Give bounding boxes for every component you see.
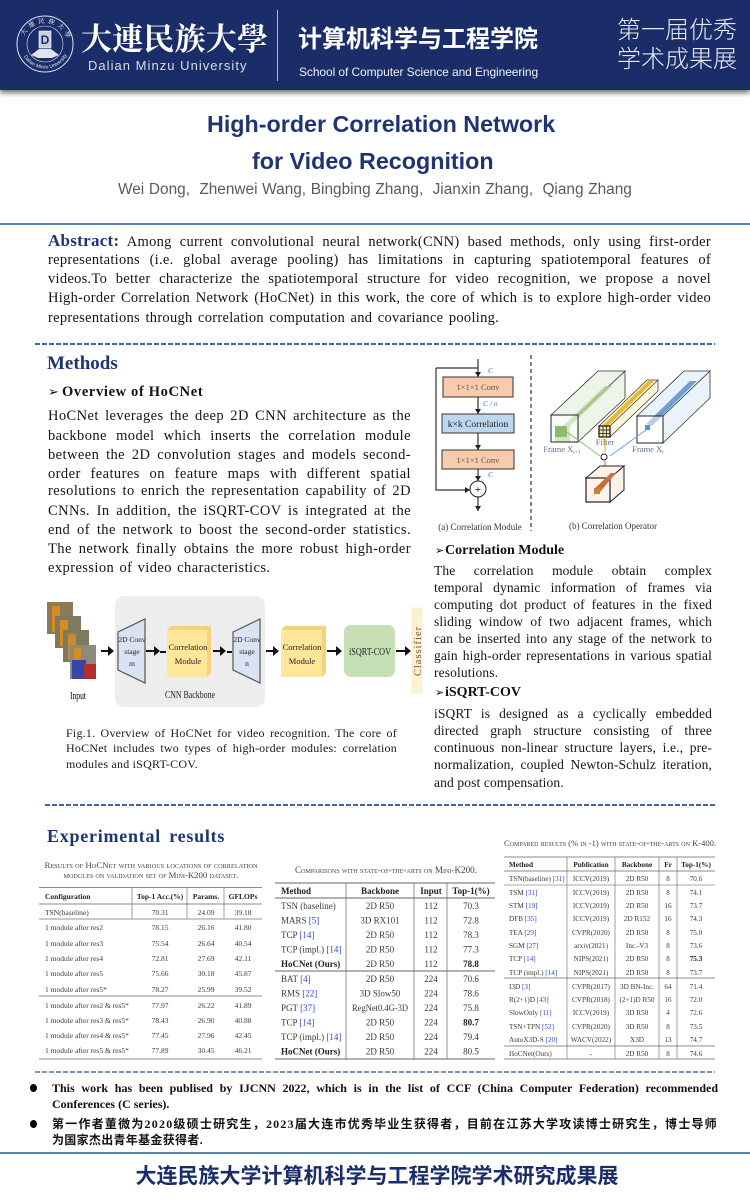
table: comparisons on K-400: 2D R50 (626, 929, 649, 937)
table: comparisons on Mini-K200: Input (420, 886, 442, 896)
table: comparisons on Mini-K200: 70.6 (463, 974, 479, 984)
table: comparisons on K-400: 16 (664, 996, 672, 1004)
table: comparisons on K-400: 73.5 (690, 1023, 703, 1031)
table: comparisons on K-400: Fr (664, 861, 673, 869)
table: comparisons on Mini-K200: 80.7 (463, 1018, 479, 1028)
text: overview paragraph: CNNs. In addition, the iSQRT-COV is integrated at the (48, 503, 411, 519)
table: comparisons on Mini-K200: TCP (impl.) [14] (281, 1032, 341, 1042)
table: comparisons on K-400: 16 (664, 915, 672, 923)
text: overview paragraph: end of the network to boost the second-order statistics. (48, 522, 411, 538)
table: comparisons on Mini-K200: Comparisons with state-of-the-arts on Mini-K200. (295, 865, 477, 875)
text: overview paragraph: The network finally obtains the more robust high-order (48, 541, 411, 557)
table: comparisons on K-400: 74.1 (690, 889, 703, 897)
table: comparisons on K-400: I3D [3] (509, 983, 530, 991)
block: correlation module 1 (167, 626, 211, 677)
subheading: Correlation Module: Correlation Module (445, 543, 564, 558)
diagram: correlation module: C (488, 366, 494, 375)
arrow (327, 650, 337, 652)
table: comparisons on K-400: NIPS(2021) (574, 955, 609, 963)
table: comparisons on Mini-K200 (275, 865, 495, 1060)
figure caption: Fig.1. Overview of HoCNet for video recognition. The core of (66, 726, 397, 740)
table: comparisons on K-400: 3D R50 (626, 1023, 649, 1031)
table: comparisons on K-400: CVPR(2018) (572, 996, 611, 1004)
figure: correlation module and operator (435, 355, 711, 532)
table: comparisons on Mini-K200: 224 (424, 1003, 438, 1013)
table: comparisons on Mini-K200: Top-1(%) (452, 886, 490, 896)
table: comparisons on K-400: 8 (666, 969, 670, 977)
table: comparisons on Mini-K200: 2D R50 (366, 1046, 395, 1056)
text: iSQRT paragraph: continuous non-linear structure layers, i.e., pre- (434, 740, 712, 755)
table: comparisons on Mini-K200: 79.4 (463, 1032, 479, 1042)
table: comparisons on K-400: 70.6 (690, 875, 703, 883)
table: correlation module locations: 75.54 (152, 939, 169, 948)
table: comparisons on K-400: 74.3 (690, 915, 703, 923)
divider (0, 223, 750, 225)
table: comparisons on K-400: ICCV(2019) (573, 875, 610, 883)
table: comparisons on K-400: - (590, 1050, 593, 1058)
table: comparisons on Mini-K200: HoCNet (Ours) (281, 959, 340, 969)
table: comparisons on K-400: TCP (impl.) [14] (509, 969, 557, 977)
subheading: iSQRT-COV: ➢ (435, 686, 444, 699)
table: correlation module locations: 77.89 (152, 1046, 169, 1055)
diagram: correlation operator: t+1 (573, 450, 581, 456)
table: comparisons on K-400: 8 (666, 875, 670, 883)
table: correlation module locations: 1 module after res3 & res5* (45, 1016, 129, 1025)
table: comparisons on K-400: 16 (664, 902, 672, 910)
table: comparisons on Mini-K200: 2D R50 (366, 974, 395, 984)
table: comparisons on K-400: SlowOnly [11] (509, 1009, 552, 1017)
arrow (213, 651, 232, 652)
table: comparisons on K-400: NIPS(2021) (574, 969, 609, 977)
table: comparisons on K-400: 2D R50 (626, 889, 649, 897)
diagram: correlation operator (543, 371, 710, 531)
table: comparisons on K-400: STM [19] (509, 902, 538, 910)
table: correlation module locations: 39.18 (235, 908, 252, 917)
table: comparisons on K-400: 8 (666, 955, 670, 963)
diagram: correlation operator: t (662, 450, 664, 456)
text: iSQRT paragraph (434, 706, 712, 790)
table: comparisons on K-400: Publication (573, 861, 609, 869)
table: correlation module locations: 27.96 (198, 1031, 215, 1040)
heading: Methods: Methods (47, 353, 118, 374)
table: comparisons on K-400: AutoX3D-S [20] (509, 1036, 558, 1044)
abstract: representations through correlation computation and covariance pooling. (48, 310, 499, 326)
note: publication (30, 1081, 718, 1111)
note: first author (30, 1117, 718, 1147)
panel: CNN backbone: CNN Backbone (165, 689, 215, 701)
table: comparisons on K-400: ICCV(2019) (573, 902, 610, 910)
table: comparisons on K-400: 64 (664, 983, 672, 991)
table: correlation module locations: 26.22 (198, 1001, 215, 1010)
table: comparisons on Mini-K200: 112 (424, 901, 438, 911)
table: comparisons on K-400: ICCV(2019) (573, 1009, 610, 1017)
table: comparisons on Mini-K200: RegNet0.4G-3D (352, 1003, 408, 1013)
table: comparisons on K-400: TSN+TPN [52] (509, 1023, 554, 1031)
title line 1: High-order Correlation Network (207, 111, 555, 137)
text: iSQRT paragraph: iSQRT is designed as a cyclically embedded (434, 706, 712, 721)
table: correlation module locations: 1 module after res5 (45, 969, 103, 978)
table: comparisons on K-400: Compared results (% in -1) with state-of-the-arts on K-400. (504, 838, 716, 848)
table: comparisons on K-400: SGM [27] (509, 942, 538, 950)
diagram: correlation module: k×k Correlation (448, 420, 508, 430)
table: comparisons on Mini-K200: RMS [22] (281, 988, 317, 998)
table: correlation module locations: 1 module after res4 (45, 954, 103, 963)
header divider (277, 10, 278, 81)
table: comparisons on Mini-K200: PGT [37] (281, 1003, 315, 1013)
note: publication: This work has been publised by IJCNN 2022, which is in the list of CCF (China Computer Federation) recommended (52, 1081, 718, 1095)
arrow (266, 650, 274, 652)
block: correlation module 2 (281, 626, 326, 677)
text: correlation module paragraph: temporal dynamic information of frames via (434, 580, 712, 595)
text: iSQRT paragraph: and post compensation. (434, 775, 564, 790)
table: comparisons on Mini-K200: 2D R50 (366, 1018, 395, 1028)
table: comparisons on Mini-K200: 112 (424, 944, 438, 954)
heading: Experimental results: Experimental results (47, 826, 225, 846)
table: comparisons on K-400: HoCNet(Ours) (509, 1050, 552, 1058)
table: correlation module locations: 40.88 (235, 1016, 252, 1025)
text: correlation module paragraph (434, 563, 712, 680)
diagram: correlation operator: (b) Correlation Operator (569, 521, 657, 531)
text: overview paragraph (48, 408, 411, 576)
text: correlation module paragraph: gain high-order representations in various spatial (434, 648, 712, 663)
diagram: correlation module: C (488, 470, 494, 479)
exhibition title: 第一届优秀 (617, 17, 737, 44)
block: iSQRT-COV (344, 625, 395, 677)
table: comparisons on K-400: 2D R50 (626, 969, 649, 977)
table: correlation module locations: 1 module after res4 & res5* (45, 1031, 129, 1040)
table: correlation module locations: GFLOPs (229, 892, 257, 901)
table: correlation module locations: 30.45 (198, 1046, 215, 1055)
table: comparisons on K-400: 75.3 (690, 955, 703, 963)
table: comparisons on K-400: DFB [35] (509, 915, 537, 923)
block: correlation module 1: Module (175, 656, 201, 666)
table: comparisons on K-400: 72.0 (690, 996, 703, 1004)
table: correlation module locations: 39.52 (235, 985, 252, 994)
block: 2D conv stage m: m (129, 659, 135, 668)
table: correlation module locations: 42.45 (235, 1031, 252, 1040)
table: comparisons on K-400: 71.4 (690, 983, 703, 991)
subheading: iSQRT-COV: iSQRT-COV (445, 685, 521, 700)
icon: university logo: Dalian Minzu University (24, 54, 67, 69)
authors: Wei Dong, Zhenwei Wang, Bingbing Zhang, Jianxin Zhang, Qiang Zhang (118, 181, 632, 198)
school name English: School of Computer Science and Engineering (299, 65, 538, 79)
table: comparisons on Mini-K200: 80.5 (463, 1046, 479, 1056)
table: comparisons on Mini-K200: 78.3 (463, 930, 479, 940)
table: comparisons on Mini-K200: 224 (424, 1032, 438, 1042)
table: correlation module locations: Params. (193, 892, 219, 901)
school name Chinese: 计算机科学与工程学院 (298, 26, 538, 53)
diagram: correlation module: 1×1×1 Conv (457, 455, 500, 465)
table: comparisons on Mini-K200: 78.6 (463, 988, 479, 998)
table: correlation module locations: 70.31 (152, 908, 169, 917)
figure: HoCNet overview diagram (47, 596, 424, 707)
table: comparisons on K-400: R(2+1)D [43] (509, 996, 549, 1004)
bullet (30, 1084, 37, 1092)
title line 2: for Video Recognition (252, 148, 494, 174)
university name English: Dalian Minzu University (88, 58, 248, 73)
table: comparisons on K-400: 8 (666, 1023, 670, 1031)
block: 2D conv stage m: stage (124, 647, 140, 656)
table: comparisons on K-400: 74.7 (690, 1036, 703, 1044)
table: comparisons on K-400: 4 (666, 1009, 670, 1017)
abstract: High-order Correlation Network (HoCNet) in this work, the core of which is to explore high-order video (48, 290, 711, 306)
table: correlation module locations: 75.66 (152, 969, 169, 978)
table: comparisons on Mini-K200: TSN (baseline) (281, 901, 336, 911)
table: comparisons on K-400: 73.6 (690, 942, 703, 950)
table: correlation module locations: 77.45 (152, 1031, 169, 1040)
table: correlation module locations: 72.81 (152, 954, 169, 963)
table: correlation module locations: Top-1 Acc.(%) (137, 892, 184, 901)
block: 2D conv stage m (118, 619, 146, 683)
block: 2D conv stage n (233, 619, 261, 683)
table: comparisons on Mini-K200: 112 (424, 930, 438, 940)
input video frames (47, 602, 96, 702)
table: correlation module locations: 1 module after res5* (45, 985, 107, 994)
table: correlation module locations: 26.90 (198, 1016, 215, 1025)
text: overview paragraph: expression of video characteristics. (48, 560, 270, 576)
table: correlation module locations: 30.18 (198, 969, 215, 978)
table: comparisons on K-400: ICCV(2019) (573, 889, 610, 897)
table: correlation module locations: 26.64 (198, 939, 215, 948)
table: correlation module locations: modules on validation set of Mini-K200 dataset. (64, 870, 238, 880)
table: correlation module locations: 1 module after res3 (45, 939, 103, 948)
table: comparisons on K-400: 8 (666, 929, 670, 937)
table: comparisons on Mini-K200: BAT [4] (281, 974, 311, 984)
table: correlation module locations: 40.54 (235, 939, 252, 948)
diagram: correlation module: 1×1×1 Conv (457, 382, 500, 392)
table: comparisons on Mini-K200: 2D R50 (366, 959, 395, 969)
divider (0, 1152, 750, 1154)
table: correlation module locations: 45.87 (235, 969, 252, 978)
table: comparisons on K-400: 2D R50 (626, 902, 649, 910)
block: 2D conv stage n: 2D Conv (233, 635, 261, 644)
diagram: correlation module (436, 359, 522, 532)
table: comparisons on K-400: TEA [29] (509, 929, 536, 937)
table: correlation module locations: TSN(baseline) (45, 908, 89, 917)
table: comparisons on K-400: 13 (664, 1036, 672, 1044)
table: comparisons on K-400: Inc.-V3 (626, 942, 648, 950)
table: correlation module locations: 26.16 (198, 923, 215, 932)
dashed divider (45, 804, 716, 806)
table: comparisons on K-400: (2+1)D R50 (620, 996, 655, 1004)
table: correlation module locations: 1 module after res2 (45, 923, 103, 932)
table: comparisons on K-400: 3D R50 (626, 1009, 649, 1017)
block: correlation module 1: Correlation (169, 642, 208, 652)
diagram: correlation operator: Frame X (632, 444, 664, 456)
table: comparisons on Mini-K200: TCP [14] (281, 1018, 314, 1028)
table: correlation module locations: Configuration (45, 892, 91, 901)
table: correlation module locations: 78.43 (152, 1016, 169, 1025)
table: comparisons on K-400: Method (509, 861, 533, 869)
table: comparisons on K-400: CVPR(2017) (572, 983, 611, 991)
text: overview paragraph: between the 2D convolution stages and models second- (48, 447, 411, 463)
block: 2D conv stage n: stage (239, 647, 255, 656)
text: correlation module paragraph: computing dot product of features in the fixed (434, 597, 712, 612)
table: comparisons on K-400: arxiv(2021) (574, 942, 609, 950)
icon: university logo: D (41, 33, 50, 47)
table: correlation module locations: 25.99 (198, 985, 215, 994)
table: comparisons on K-400: 2D R50 (626, 955, 649, 963)
block: classifier: Classifier (413, 626, 424, 676)
separator (530, 355, 532, 531)
diagram: correlation operator: Filter (596, 437, 614, 447)
table: comparisons on K-400: 73.7 (690, 969, 703, 977)
diagram: correlation operator: Frame X (543, 444, 581, 456)
table: comparisons on K-400: 3D BN-Inc. (620, 983, 654, 991)
block: correlation module 2: Module (289, 656, 315, 666)
text: overview paragraph: backbone model which inserts the correlation module (48, 428, 411, 444)
diagram: correlation module: (a) Correlation Module (438, 522, 522, 532)
table: comparisons on K-400: 8 (666, 942, 670, 950)
footer title: 大连民族大学计算机科学与工程学院学术研究成果展 (136, 1165, 618, 1188)
table: comparisons on Mini-K200: 3D Slow50 (360, 988, 401, 998)
diagram: correlation module: + (475, 484, 481, 496)
table: comparisons on Mini-K200: 2D R50 (366, 944, 395, 954)
text: correlation module paragraph: The correlation module obtain complex (434, 563, 712, 578)
block: correlation module 2: Correlation (283, 642, 322, 652)
text: iSQRT paragraph: normalization, coupled Newton-Schulz iteration, (434, 757, 712, 772)
block: 2D conv stage n: n (245, 659, 249, 668)
table: comparisons on K-400: Top-1(%) (681, 861, 711, 869)
abstract: representations (i.e. global average pooling) has limitations in capturing spatiotemporal features of (48, 252, 711, 268)
table: comparisons on Mini-K200: 224 (424, 974, 438, 984)
table: comparisons on K-400: 72.6 (690, 1009, 703, 1017)
exhibition title: 学术成果展 (617, 46, 737, 73)
table: comparisons on K-400: TSM [31] (509, 889, 538, 897)
table: correlation module locations: 77.97 (152, 1001, 169, 1010)
table: comparisons on Mini-K200: 224 (424, 988, 438, 998)
subheading: Correlation Module: ➢ (435, 544, 444, 557)
table: comparisons on Mini-K200: TCP [14] (281, 930, 314, 940)
table: comparisons on K-400 (504, 838, 716, 1060)
table: comparisons on K-400: 2D R50 (626, 1050, 649, 1058)
note: first author: 为国家杰出青年基金获得者. (52, 1133, 203, 1147)
text: correlation module paragraph: sliding window of two adjacent frames, which (434, 614, 712, 629)
table: comparisons on K-400: 8 (666, 889, 670, 897)
table: correlation module locations: 46.21 (235, 1046, 252, 1055)
dashed divider (35, 343, 715, 345)
note: publication: Conferences (C series). (52, 1097, 169, 1111)
icon: university logo (16, 16, 74, 72)
table: comparisons on Mini-K200: 3D RX101 (360, 916, 400, 926)
text: iSQRT paragraph: directed graph structure consisting of three (434, 723, 712, 738)
table: correlation module locations: 41.80 (235, 923, 252, 932)
table: comparisons on Mini-K200: HoCNet (Ours) (281, 1046, 340, 1056)
table: comparisons on Mini-K200: TCP (impl.) [14] (281, 944, 341, 954)
table: comparisons on K-400: TCP [14] (509, 955, 536, 963)
table: comparisons on Mini-K200: 2D R50 (366, 930, 395, 940)
text: overview paragraph: order features on feature maps with different spatial (48, 466, 411, 482)
table: comparisons on Mini-K200: 224 (424, 1046, 438, 1056)
subheading: Overview of HoCNet: ➢ (48, 385, 60, 400)
table: correlation module locations: 41.89 (235, 1001, 252, 1010)
table: comparisons on K-400: TSN(baseline) [31] (509, 875, 565, 883)
table: comparisons on Mini-K200: Method (281, 886, 311, 896)
table: correlation module locations (39, 860, 262, 1060)
text: correlation module paragraph: resolutions. (434, 665, 498, 680)
table: comparisons on Mini-K200: 112 (424, 916, 438, 926)
university name Chinese: 大連民族大學 (81, 14, 268, 59)
abstract: videos.To better characterize the spatiotemporal structure for video recognition, we propose a novel (48, 271, 711, 287)
block: 2D conv stage m: 2D Conv (118, 635, 146, 644)
table: comparisons on K-400: WACV(2022) (571, 1036, 612, 1044)
subheading: Overview of HoCNet: Overview of HoCNet (62, 384, 203, 400)
table: comparisons on K-400: 74.6 (690, 1050, 703, 1058)
table: comparisons on Mini-K200: 77.3 (463, 944, 479, 954)
table: correlation module locations: 78.27 (152, 985, 169, 994)
table: correlation module locations: 24.09 (198, 908, 215, 917)
table: correlation module locations: 1 module after res5 & res5* (45, 1046, 129, 1055)
bullet (30, 1120, 37, 1128)
header banner (0, 0, 750, 90)
arrow (101, 650, 109, 652)
table: comparisons on Mini-K200: 2D R50 (366, 901, 395, 911)
diagram: correlation module: C / n (483, 399, 498, 408)
table: correlation module locations: 78.15 (152, 923, 169, 932)
table: comparisons on K-400: X3D (630, 1036, 644, 1044)
table: comparisons on Mini-K200: 72.8 (463, 916, 479, 926)
table: comparisons on Mini-K200: Backbone (361, 886, 399, 896)
table: comparisons on Mini-K200: 78.8 (463, 959, 479, 969)
table: comparisons on K-400: 8 (666, 1050, 670, 1058)
figure caption: HoCNet includes two types of high-order modules: correlation (66, 741, 397, 755)
table: comparisons on Mini-K200: 112 (424, 959, 438, 969)
figure caption (66, 726, 397, 771)
table: comparisons on K-400: 75.0 (690, 929, 703, 937)
icon: university logo: 大連民族大學 (21, 18, 71, 38)
table: comparisons on Mini-K200: 75.8 (463, 1003, 479, 1013)
table: correlation module locations: 27.69 (198, 954, 215, 963)
table: comparisons on Mini-K200: 224 (424, 1018, 438, 1028)
figure caption: modules and iSQRT-COV. (66, 757, 198, 771)
arrow (396, 650, 406, 652)
exhibition title (617, 17, 737, 73)
table: comparisons on K-400: CVPR(2020) (572, 929, 611, 937)
table: correlation module locations: Results of HoCNet with various locations of correlation (44, 860, 258, 870)
block: classifier (412, 608, 424, 693)
panel: CNN backbone (115, 596, 265, 707)
table: comparisons on K-400: 73.7 (690, 902, 703, 910)
text: overview paragraph: resolutions to enrich the representation capability of 2D (48, 483, 411, 499)
arrow (146, 651, 166, 652)
note: first author: 第一作者董微为2020级硕士研究生，2023届大连市优秀毕业生获得者，目前在江苏大学攻读博士研究生，博士导师 (52, 1117, 718, 1131)
table: correlation module locations: 42.11 (235, 954, 252, 963)
table: comparisons on K-400: 2D R152 (624, 915, 650, 923)
text: overview paragraph: HoCNet leverages the deep 2D CNN architecture as the (48, 408, 411, 424)
block: iSQRT-COV: iSQRT-COV (349, 647, 392, 658)
table: comparisons on Mini-K200: MARS [5] (281, 916, 319, 926)
table: comparisons on K-400: ICCV(2019) (573, 915, 610, 923)
text: correlation module paragraph: can be inserted into any stage of the network to (434, 631, 712, 646)
table: comparisons on Mini-K200: 70.3 (463, 901, 479, 911)
dashed divider (35, 1071, 715, 1073)
table: comparisons on K-400: Backbone (622, 861, 652, 869)
table: correlation module locations: 1 module after res2 & res5* (45, 1001, 129, 1010)
table: comparisons on K-400: CVPR(2020) (572, 1023, 611, 1031)
table: comparisons on K-400: 2D R50 (626, 875, 649, 883)
abstract (48, 232, 711, 326)
table: comparisons on Mini-K200: 2D R50 (366, 1032, 395, 1042)
input video frames: Input (70, 690, 86, 702)
